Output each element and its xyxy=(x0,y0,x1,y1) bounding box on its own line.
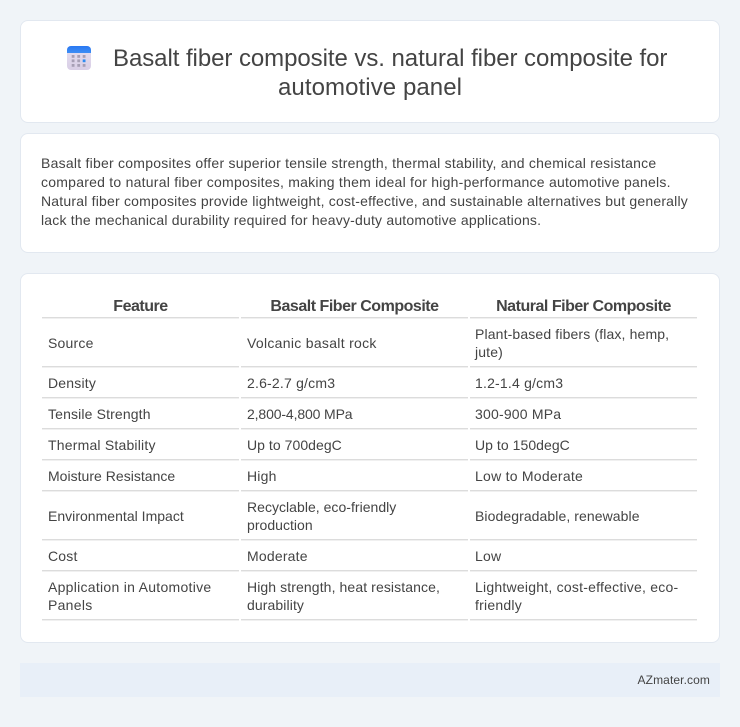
header panel xyxy=(20,20,720,123)
footer bar xyxy=(20,663,720,697)
row: cost xyxy=(48,548,502,564)
row: source: Plant-based fibers (flax, hemp, xyxy=(475,326,669,342)
row: source: Source xyxy=(48,335,94,351)
row: tensile strength: Tensile Strength xyxy=(48,406,151,422)
row: environmental impact xyxy=(48,499,640,533)
summary text: Natural fiber composites provide lightweight, cost-effective, and sustainable alternatives but generally xyxy=(41,193,688,209)
table header: Basalt Fiber Composite xyxy=(270,298,439,315)
row: density xyxy=(48,375,563,391)
summary panel xyxy=(20,133,720,253)
summary text: Basalt fiber composites offer superior tensile strength, thermal stability, and chemical resistance xyxy=(41,155,656,171)
row: application xyxy=(48,579,678,613)
icon: calendar xyxy=(67,46,91,70)
title xyxy=(113,45,667,101)
row: moisture resistance xyxy=(48,468,583,484)
row: environmental impact: Environmental Impact xyxy=(48,508,184,524)
row: environmental impact: production xyxy=(247,517,313,533)
row: application: durability xyxy=(247,597,304,613)
row: moisture resistance: High xyxy=(247,468,277,484)
table header xyxy=(113,298,671,315)
table header: Feature xyxy=(113,298,168,315)
row: application: Application in Automotive xyxy=(48,579,211,595)
row: density: Density xyxy=(48,375,96,391)
row: thermal stability xyxy=(48,437,570,453)
row: application: High strength, heat resistance, xyxy=(247,579,440,595)
summary text xyxy=(41,155,688,228)
row: environmental impact: Biodegradable, renewable xyxy=(475,508,640,524)
row: environmental impact: Recyclable, eco-friendly xyxy=(247,499,396,515)
row: moisture resistance: Low to Moderate xyxy=(475,468,583,484)
row: cost: Moderate xyxy=(247,548,308,564)
row: tensile strength: 2,800-4,800 MPa xyxy=(247,406,352,422)
table header: Natural Fiber Composite xyxy=(496,298,671,315)
row: application: friendly xyxy=(475,597,522,613)
row: tensile strength xyxy=(48,406,562,422)
row: density: 2.6-2.7 g/cm3 xyxy=(247,375,335,391)
row: application: Lightweight, cost-effective, eco- xyxy=(475,579,678,595)
row: thermal stability: Up to 700degC xyxy=(247,437,342,453)
summary text: compared to natural fiber composites, making them ideal for high-performance automotive panels. xyxy=(41,174,671,190)
row: density: 1.2-1.4 g/cm3 xyxy=(475,375,563,391)
row: thermal stability: Thermal Stability xyxy=(48,437,156,453)
row: cost: Cost xyxy=(48,548,78,564)
row: thermal stability: Up to 150degC xyxy=(475,437,570,453)
row: source xyxy=(48,326,669,360)
title: automotive panel xyxy=(278,74,462,101)
table panel xyxy=(20,273,720,643)
row: source: Volcanic basalt rock xyxy=(247,335,377,351)
footer credit: AZmater.com xyxy=(638,673,710,687)
row: tensile strength: 300-900 MPa xyxy=(475,406,561,422)
row: moisture resistance: Moisture Resistance xyxy=(48,468,175,484)
row: cost: Low xyxy=(475,548,501,564)
row: application: Panels xyxy=(48,597,92,613)
summary text: lack the mechanical durability required for heavy-duty automotive applications. xyxy=(41,212,541,228)
row: source: jute) xyxy=(475,344,503,360)
comparison table xyxy=(42,298,697,621)
title: Basalt fiber composite vs. natural fiber composite for xyxy=(113,45,667,72)
